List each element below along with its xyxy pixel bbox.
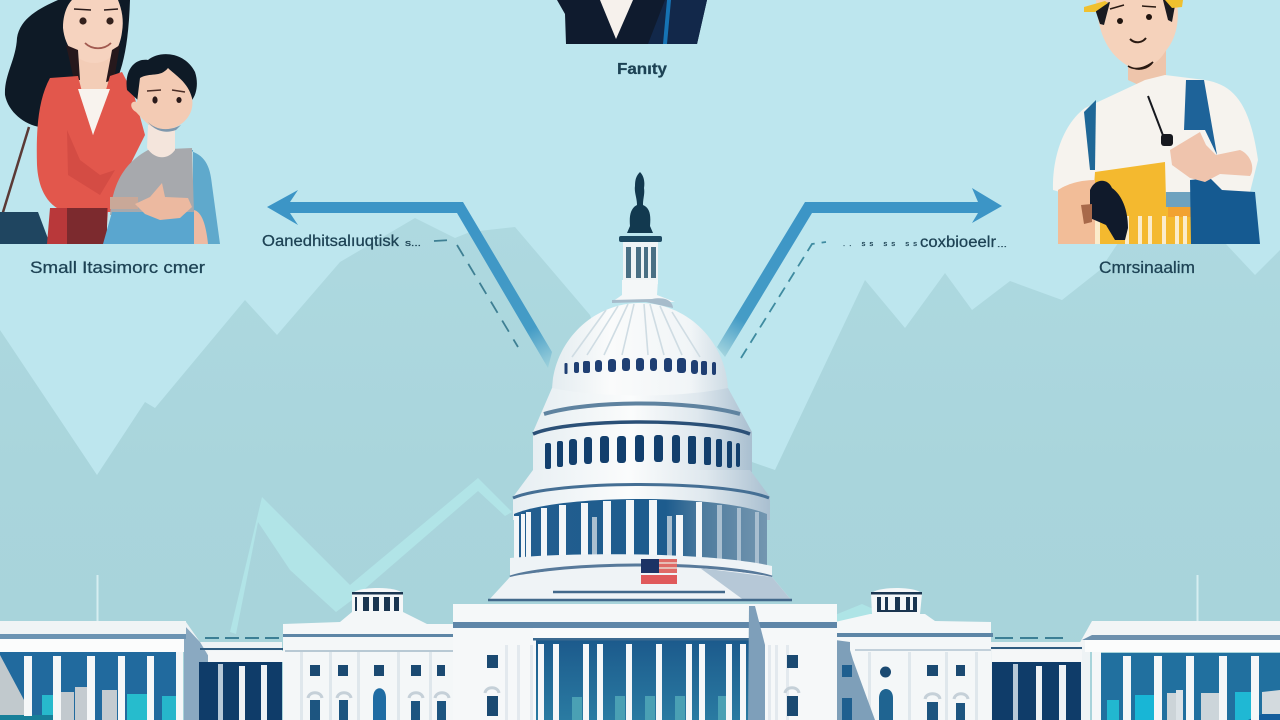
central block windows (487, 655, 798, 716)
connector dark bay left (199, 662, 282, 720)
connector roof dashes right (995, 637, 1070, 639)
apron orange edge (1168, 207, 1191, 217)
left bay columns (24, 652, 183, 720)
dashed connector: right (741, 242, 826, 358)
blue tie stripe (663, 0, 671, 44)
person: family (man in suit, cropped) (557, 0, 707, 44)
colonnade columns (514, 500, 702, 570)
woman neck (72, 55, 115, 130)
woman trousers shade (67, 208, 107, 244)
right pavilion arched door (879, 689, 893, 720)
colonnade floor (510, 554, 772, 578)
left pavilion roof (283, 612, 456, 720)
boy sleeve cuff (110, 197, 138, 209)
woman face (63, 0, 123, 63)
portico lower frieze (533, 628, 749, 638)
left side wing far (0, 621, 283, 720)
flagpole right (1196, 575, 1198, 621)
base shadow ring (510, 565, 772, 577)
lower ring band (513, 484, 769, 498)
right pavilion pilasters (868, 652, 978, 720)
outer right wing band (1082, 635, 1280, 640)
right cupola windows (871, 592, 922, 612)
worker dark glove (1090, 181, 1128, 240)
shirt V (600, 0, 633, 39)
right pavilion band (835, 633, 993, 637)
apron stripes (1095, 216, 1187, 244)
label: family: Fanıty (617, 61, 667, 78)
right pavilion upper windows (927, 665, 965, 676)
connector roof dashes left (205, 637, 282, 639)
right bay skyline (1107, 690, 1280, 720)
label: small business owner: Small Itasimorc cmer (30, 259, 206, 277)
connector columns right (1013, 664, 1066, 720)
boy lower blue (103, 212, 194, 244)
colonnade shaded columns (592, 505, 759, 570)
connector band left (200, 648, 283, 650)
boy sleeve (188, 150, 220, 244)
suit jacket (557, 0, 707, 44)
bag strap (0, 127, 29, 222)
right pavilion (835, 588, 993, 720)
drum windows (545, 435, 740, 469)
caption tail: left arrow: s... (405, 238, 421, 248)
worker yellow apron (1090, 162, 1191, 244)
caption: right arrow: coxbioeelr (920, 234, 996, 251)
worker hard hat right brim (1165, 0, 1183, 8)
caption tail: right arrow: ... (997, 242, 1007, 249)
left pavilion band (283, 634, 455, 637)
outer left wing frieze (0, 639, 184, 652)
left cupola windows (352, 592, 403, 611)
connector frieze left (208, 651, 283, 662)
central block pilasters (505, 645, 789, 720)
worker face (1096, 0, 1178, 68)
central block window hoods (485, 688, 799, 693)
boy shirt (110, 148, 194, 215)
left pavilion arched door (373, 688, 386, 720)
bag (0, 212, 50, 244)
drum flare (533, 388, 752, 472)
outer left bay (0, 652, 178, 720)
person: small business owner (woman and boy) (0, 0, 220, 244)
portico inner pale doors (572, 696, 726, 720)
main dome (540, 303, 740, 420)
woman V-neck (78, 89, 110, 135)
central block walls (453, 640, 837, 720)
boy hair (127, 54, 197, 102)
left bay skyline (0, 655, 176, 720)
dome ribs (572, 304, 700, 357)
left pavilion pilasters (300, 652, 432, 720)
left cupola (352, 588, 403, 612)
connector columns left (218, 664, 267, 720)
worker hair (1094, 0, 1176, 25)
portico capital line (533, 638, 750, 640)
dome base tier (488, 568, 792, 601)
person: construction worker (1053, 0, 1260, 244)
connector shade left (184, 625, 212, 720)
lower ring (513, 470, 770, 520)
woman hair strands (66, 45, 120, 82)
worker tool cord (1148, 96, 1164, 138)
base steps (488, 592, 792, 600)
woman dark fold (67, 130, 115, 195)
right pavilion diagonal shadow (835, 640, 875, 720)
outer right bay (1100, 653, 1280, 720)
Capitol dome and central block (453, 172, 837, 720)
portico bay (536, 640, 756, 720)
background mountains (0, 218, 1280, 720)
right pavilion window hoods (925, 694, 968, 699)
caption lead: right arrow: .. ss ss ss (843, 239, 917, 248)
portico columns (538, 644, 746, 720)
woman red top (37, 72, 145, 212)
dome base shadow (700, 568, 792, 601)
dome ring one (544, 404, 740, 414)
worker neck (1128, 50, 1166, 88)
worker left strap (1084, 100, 1096, 170)
connector dark bay right (992, 662, 1081, 720)
right pavilion circular window (880, 666, 891, 678)
flag (641, 559, 677, 584)
portico pediment (453, 604, 837, 640)
suit right panel (648, 0, 707, 44)
connector block left (186, 622, 282, 720)
woman eyes and smile (74, 9, 118, 48)
worker tool plug (1161, 134, 1173, 146)
worker right hand and arm (1170, 132, 1252, 182)
boy facial features (147, 90, 185, 132)
lantern base (612, 280, 675, 302)
woman trousers (47, 208, 108, 244)
left pavilion (283, 588, 456, 720)
outer right wing frieze (1085, 640, 1280, 652)
label: construction worker: Cmrsinaalim (1099, 259, 1195, 277)
right pavilion lower windows (927, 702, 965, 720)
worker blue overall (1190, 178, 1260, 244)
connector block right (990, 642, 1090, 720)
connector band right (990, 647, 1082, 649)
worker left forearm (1058, 180, 1095, 244)
outer left wing roof (0, 621, 186, 635)
left pavilion cornice (285, 650, 455, 652)
lantern body (623, 242, 658, 284)
dome ring two (533, 422, 750, 434)
flagpole left (96, 575, 98, 621)
boy arm (194, 210, 208, 244)
central block right shade (748, 606, 765, 720)
lantern cap (619, 236, 662, 242)
worker facial features (1110, 5, 1156, 69)
pale wedge beside right wing (835, 604, 880, 625)
left pavilion window hoods (308, 693, 449, 698)
lantern base shelf (612, 298, 673, 308)
worker held handle (1081, 204, 1092, 224)
left pavilion upper windows (310, 665, 445, 676)
boy face (131, 68, 192, 130)
apron blue pocket (1166, 192, 1191, 207)
woman hair (5, 0, 130, 127)
boy hand on chest (135, 183, 192, 220)
worker hard hat left brim (1084, 1, 1108, 12)
lower colonnade (514, 499, 767, 572)
lantern columns (626, 247, 656, 278)
worker shirt (1053, 75, 1258, 192)
boy neck (147, 125, 175, 157)
connector frieze right (992, 650, 1082, 662)
right side wing far (990, 621, 1280, 720)
statue of freedom (627, 172, 653, 233)
outer right wing roof (1078, 621, 1280, 646)
dome windows (564, 358, 716, 375)
arrow: left, pointing to small business owner (267, 190, 552, 368)
right pavilion roof (835, 614, 991, 720)
right cupola (871, 588, 922, 614)
arrow: right, pointing to construction worker (717, 188, 1002, 357)
left pavilion lower windows (310, 700, 446, 720)
caption: left arrow: Oanedhitsalıuqtisk (262, 233, 399, 250)
right shadow window (842, 665, 852, 720)
portico band (453, 622, 837, 628)
right bay columns (1092, 652, 1259, 720)
outer left wing band (0, 634, 186, 639)
right pavilion cornice (855, 649, 991, 651)
worker right strap (1184, 80, 1217, 155)
dashed connector: left (434, 240, 518, 347)
background line chart zigzag (230, 478, 512, 634)
